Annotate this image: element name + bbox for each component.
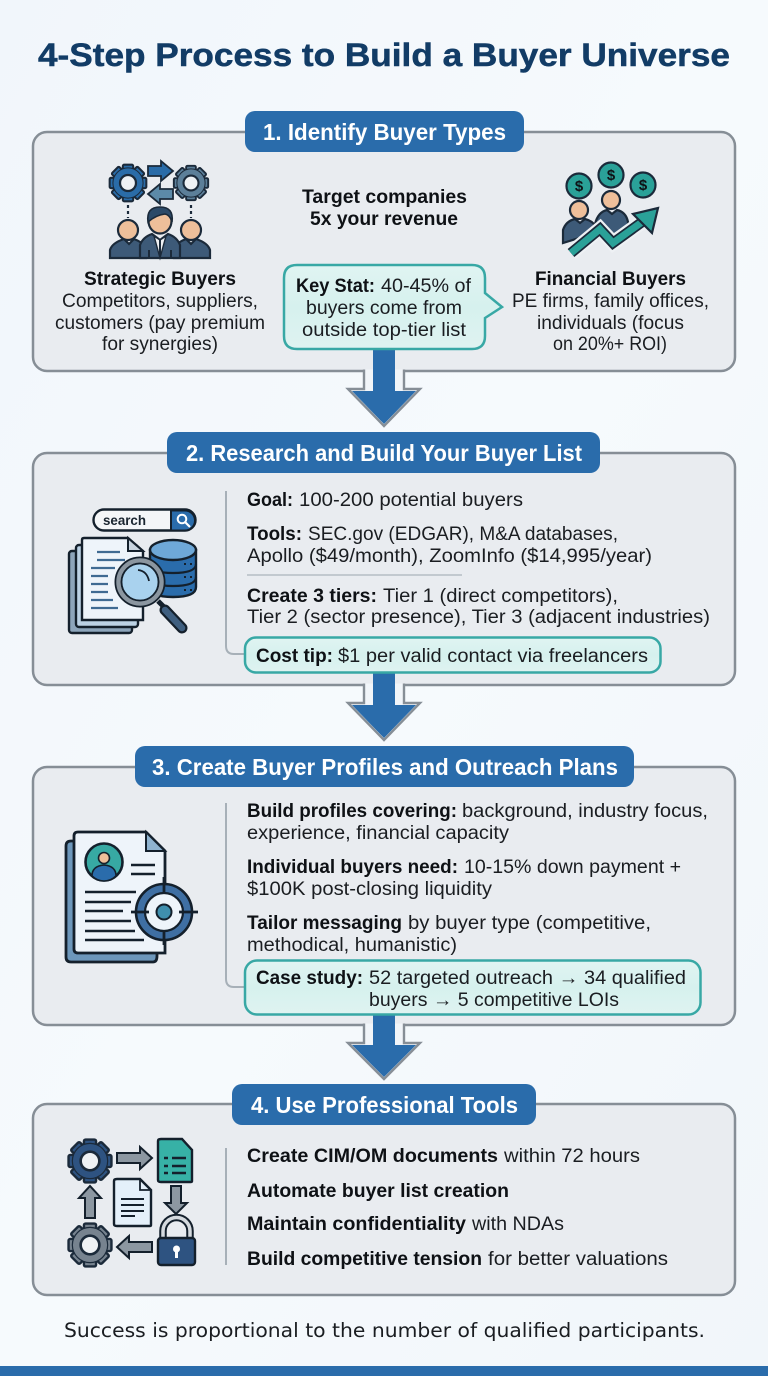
divider line: step 3 [226,803,245,987]
heading: step 3 [135,746,634,787]
text: competitive tension [247,1249,668,1270]
callout: cost tip: $1 per valid contact via freelancers [338,646,648,667]
arrow: step 3 to step 4 [348,1012,420,1079]
text: confidentiality [247,1214,564,1235]
arrow: step 2 to step 3 [348,670,420,740]
heading: step 2 [167,432,600,473]
icon: search documents and database [69,510,196,633]
text: create 3 tiers: Tier 2 (sector presence), Tier 3 (adjacent industries) [247,607,710,628]
text: tools: SEC.gov (EDGAR), M&A databases, [308,524,618,545]
text: strategic buyers: Strategic Buyers [84,269,236,290]
text: competitive tension: Build competitive tension [247,1249,482,1270]
text: strategic buyers: Competitors, suppliers, [62,291,258,312]
text: confidentiality: Maintain confidentiality [247,1214,466,1235]
text: individual buyers: 10-15% down payment + [464,857,681,878]
text: build profiles: Build profiles covering: [247,801,457,822]
callout: case study [245,960,700,1014]
callout: key stat: outside top-tier list [302,320,467,341]
text: goal: Goal: [247,490,293,511]
text: create 3 tiers: Create 3 tiers: [247,586,377,607]
text: tailor messaging: Tailor messaging [247,913,402,934]
heading: step 4: 4. Use Professional Tools [251,1092,518,1118]
panel: step 3 profiles [33,746,735,1025]
text: financial buyers: individuals (focus [537,313,684,334]
bottom bar [0,1366,768,1376]
text: build profiles: experience, financial capacity [247,823,510,844]
text: tools: Apollo ($49/month), ZoomInfo ($14,995/year) [247,546,652,567]
callout: case study: Case study: [256,968,363,989]
text: create CIM/OM [247,1146,640,1167]
panel: step 1 identify buyer types [33,111,735,371]
heading: step 1 [245,111,524,152]
text: financial buyers: PE firms, family offices, [512,291,709,312]
text: individual buyers [247,857,681,900]
icon: automation workflow [69,1139,195,1266]
text: create 3 tiers [247,586,710,628]
panel: step 2 research [33,432,735,685]
icon: financial buyers: $ [575,178,584,195]
text: tools [247,524,652,567]
text: competitive tension: for better valuations [488,1249,668,1270]
text: individual buyers: Individual buyers need: [247,857,458,878]
divider line: step 2 [226,491,245,654]
text: tailor messaging: methodical, humanistic) [247,935,457,956]
text: target companies [302,187,467,230]
icon: financial buyers: $ [639,177,648,194]
heading: step 1: 1. Identify Buyer Types [263,119,506,145]
heading: step 3: 3. Create Buyer Profiles and Outreach Plans [152,754,618,780]
heading: step 2: 2. Research and Build Your Buyer List [186,440,582,466]
footer tagline: Success is proportional to the number of qualified participants. [64,1319,705,1342]
text: strategic buyers [55,269,265,355]
text: individual buyers: $100K post-closing liquidity [247,879,493,900]
icon: financial buyers [563,162,658,253]
text: tools: Tools: [247,524,302,545]
callout: key stat: 40-45% of [381,276,472,297]
callout: case study: buyers → 5 competitive LOIs [369,990,619,1011]
text: strategic buyers: for synergies) [102,334,218,355]
text: goal: 100-200 potential buyers [299,490,523,511]
text: build profiles: background, industry focus, [462,801,708,822]
title: 4-Step Process to Build a Buyer Universe [38,37,730,73]
panel: step 4 tools [33,1084,735,1295]
icon: search documents and database: search [103,512,146,528]
icon: strategic buyers gears and people [110,161,210,258]
text: create CIM/OM: Create CIM/OM documents [247,1146,498,1167]
text: tailor messaging: by buyer type (competitive, [408,913,651,934]
callout: key stat [284,265,502,349]
arrow: step 1 to step 2 [348,349,420,426]
text: target companies: Target companies [302,187,467,208]
callout: cost tip: Cost tip: [256,646,333,667]
text: create CIM/OM: within 72 hours [503,1146,640,1167]
text: financial buyers [512,269,709,355]
callout: key stat: buyers come from [306,298,462,319]
text: target companies: 5x your revenue [310,209,458,230]
divider line: step 4 [225,1148,227,1265]
text: create 3 tiers: Tier 1 (direct competitors), [383,586,618,607]
text: financial buyers: Financial Buyers [535,269,686,290]
text: build profiles [247,801,708,844]
heading: step 4 [232,1084,536,1125]
callout: key stat: Key Stat: [296,276,375,297]
icon: financial buyers: $ [607,167,616,184]
icon: buyer profile document with target [66,832,198,962]
text: automate: Automate buyer list creation [247,1181,509,1202]
text: confidentiality: with NDAs [471,1214,564,1235]
text: strategic buyers: customers (pay premium [55,313,265,334]
callout: cost tip [245,638,660,672]
text: financial buyers: on 20%+ ROI) [553,334,667,355]
text: tailor messaging [247,913,651,956]
callout: case study: 52 targeted outreach → 34 qualified [369,968,686,989]
